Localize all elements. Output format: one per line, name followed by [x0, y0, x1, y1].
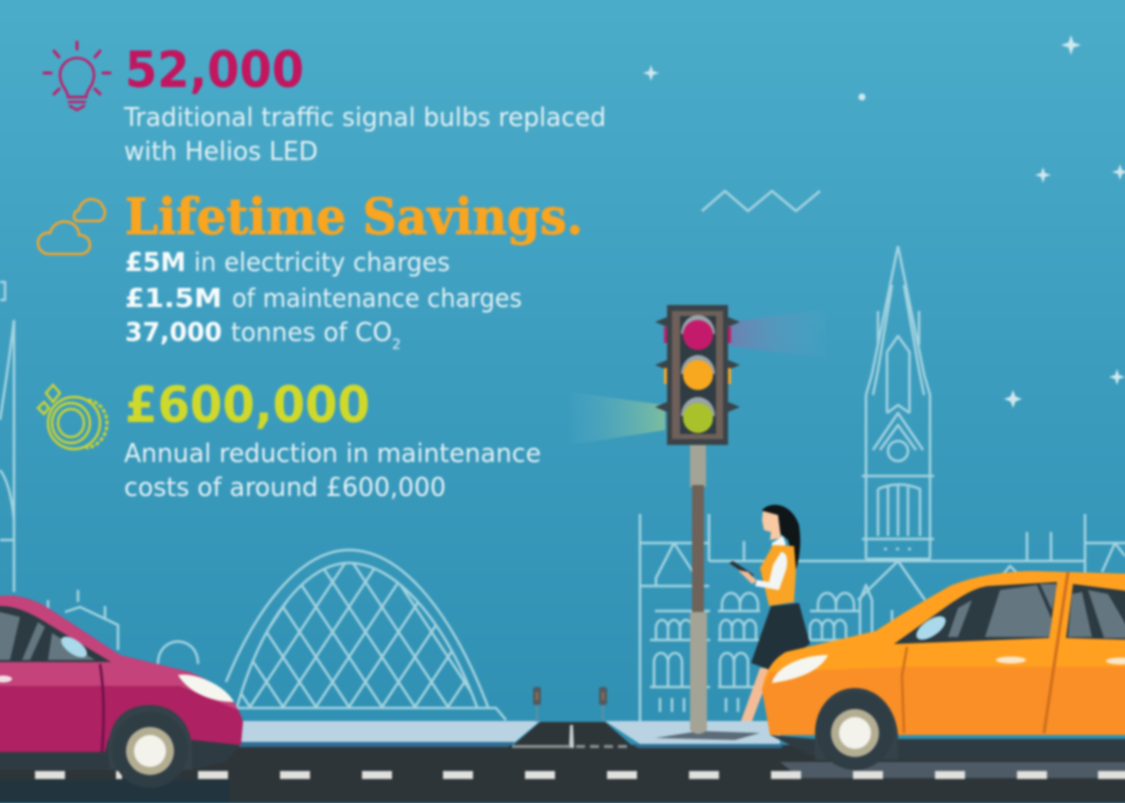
town hall building outline	[640, 246, 1125, 721]
savings list: 37,000	[125, 318, 222, 348]
sidewalk and road	[0, 721, 1125, 803]
small distant traffic signals	[533, 687, 607, 722]
heading: Lifetime Savings.	[125, 187, 583, 246]
savings list: £1.5M	[125, 284, 222, 314]
woman with phone	[729, 505, 810, 721]
savings list: 2	[392, 337, 401, 353]
icon: coin with sparkles	[38, 385, 107, 449]
savings list: £5M	[125, 248, 186, 278]
savings list: in electricity charges	[194, 248, 450, 278]
main facade	[640, 514, 1125, 721]
icon: light bulb	[44, 42, 110, 110]
savings list: of maintenance charges	[232, 284, 522, 314]
savings list	[125, 248, 522, 353]
road lane dashes	[35, 771, 1125, 779]
description	[123, 103, 606, 167]
orange car	[762, 571, 1125, 770]
savings list: tonnes of CO	[231, 318, 392, 348]
description: costs of around £600,000	[124, 473, 446, 503]
heading: £600,000	[125, 376, 370, 434]
stat: lifetime savings	[38, 187, 583, 353]
icon: clouds	[38, 199, 105, 254]
description	[124, 439, 541, 503]
description: Traditional traffic signal bulbs replaced	[123, 103, 606, 133]
description: with Helios LED	[124, 137, 318, 167]
clock tower	[862, 246, 934, 559]
traffic light	[655, 305, 740, 734]
stat: £600,000 reduction	[38, 376, 541, 503]
stat: 52,000 bulbs replaced	[44, 41, 606, 167]
zigzag bird line	[702, 191, 820, 211]
magenta car	[0, 595, 243, 788]
stars	[643, 35, 1125, 408]
description: Annual reduction in maintenance	[124, 439, 541, 469]
left skyline fragment	[0, 282, 198, 664]
heading: 52,000	[125, 41, 304, 99]
dome bridge outline	[224, 547, 508, 722]
light beams	[570, 309, 826, 445]
